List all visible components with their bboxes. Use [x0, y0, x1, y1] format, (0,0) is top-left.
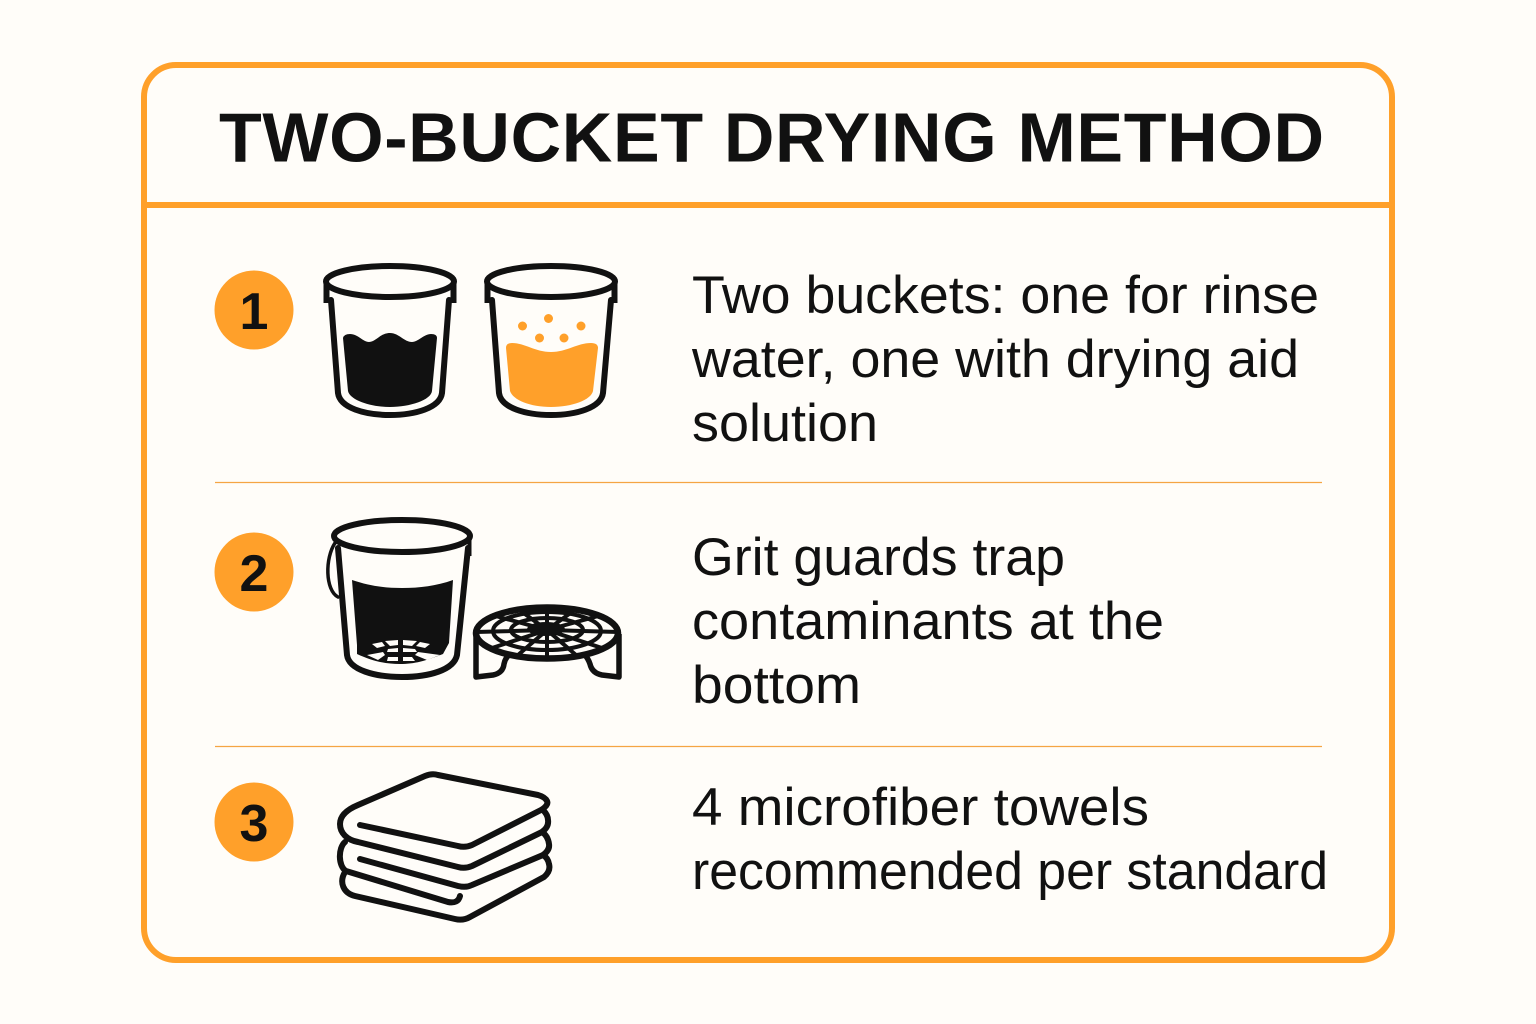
step 1 text: solution	[692, 394, 878, 453]
step 2	[214, 520, 1164, 715]
number badge 2	[214, 532, 294, 612]
icon: drying aid bucket	[487, 266, 615, 415]
step 1 text: water, one with drying aid	[691, 330, 1299, 389]
number badge 1: 1	[240, 283, 268, 341]
step 3 text: recommended per standard	[692, 842, 1328, 901]
icon: bucket with grit guard	[328, 520, 470, 677]
step 2 text: bottom	[692, 656, 861, 715]
number badge 1	[214, 270, 294, 350]
step 2 text: Grit guards trap	[692, 528, 1065, 587]
heading: TWO-BUCKET DRYING METHOD	[219, 98, 1324, 176]
step 2 text	[692, 528, 1164, 715]
card border	[144, 65, 1392, 960]
step 3 text: 4 microfiber towels	[692, 778, 1149, 837]
icon: rinse water bucket	[326, 266, 454, 415]
icon: folded towels	[340, 774, 549, 920]
icon: grit guard	[476, 607, 619, 677]
step 1	[214, 266, 1319, 453]
step 2 text: contaminants at the	[692, 592, 1164, 651]
step 3	[214, 774, 1328, 920]
number badge 2: 2	[240, 545, 268, 603]
step 1 text	[691, 266, 1319, 453]
step 1 text: Two buckets: one for rinse	[692, 266, 1319, 325]
panel: main card	[144, 65, 1392, 960]
step 3 text	[692, 778, 1328, 901]
number badge 3	[214, 782, 294, 862]
number badge 3: 3	[240, 795, 268, 853]
